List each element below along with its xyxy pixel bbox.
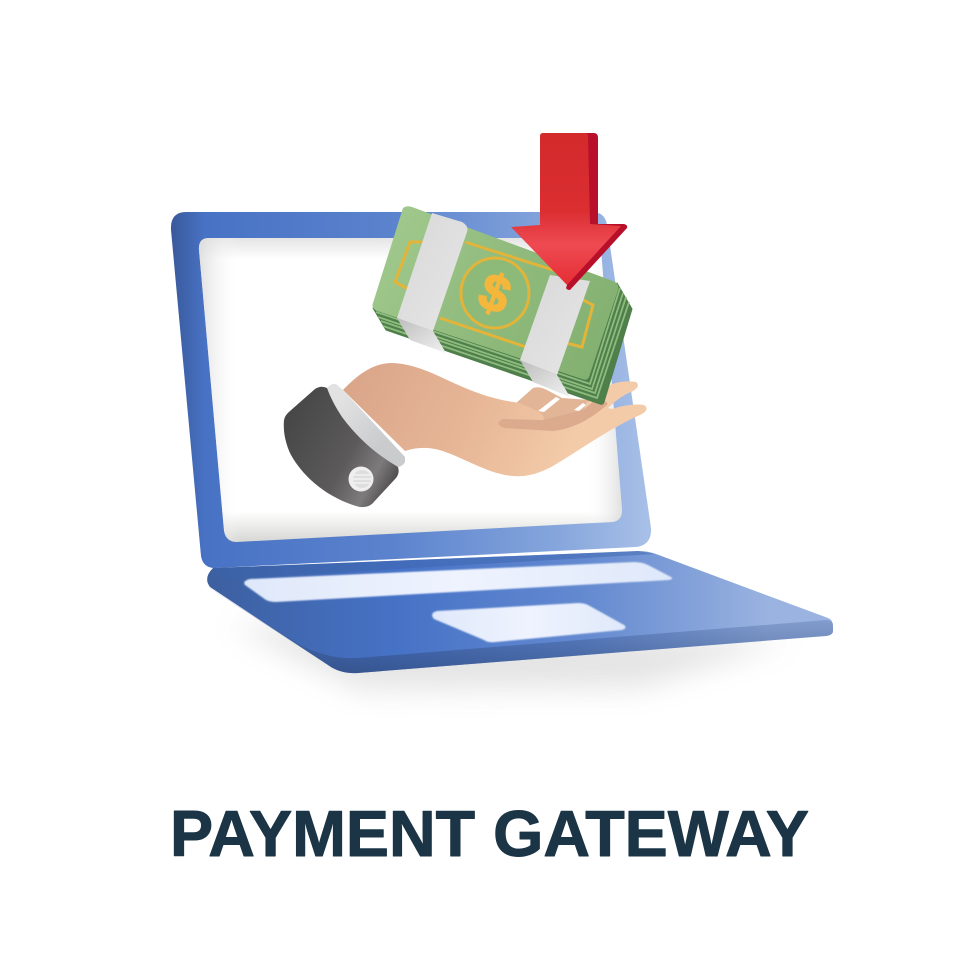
arrow face [511,133,621,285]
jacket sleeve [284,387,399,507]
trackpad [432,603,626,642]
keyboard area [244,562,672,602]
laptop base [206,551,833,673]
left paper band [397,213,467,353]
arrow side shadow [566,133,627,290]
money stack [372,206,632,404]
shirt cuff [327,384,405,467]
bill gold border [395,242,593,347]
coin [461,258,529,328]
back fingers [515,387,590,425]
right paper band [520,275,590,397]
red down arrow [511,133,627,290]
bill stack sides [373,283,632,404]
sleeve button [348,466,374,492]
hand with sleeve [284,363,647,507]
top bill [372,206,618,380]
palm crease [498,396,608,431]
laptop lid [171,212,651,568]
hand [343,363,647,476]
coin: $ [471,262,518,326]
laptop shadow [230,625,790,690]
title: PAYMENT GATEWAY [170,797,809,870]
laptop [171,212,833,690]
finger gaps [538,397,586,412]
laptop screen [199,238,622,542]
